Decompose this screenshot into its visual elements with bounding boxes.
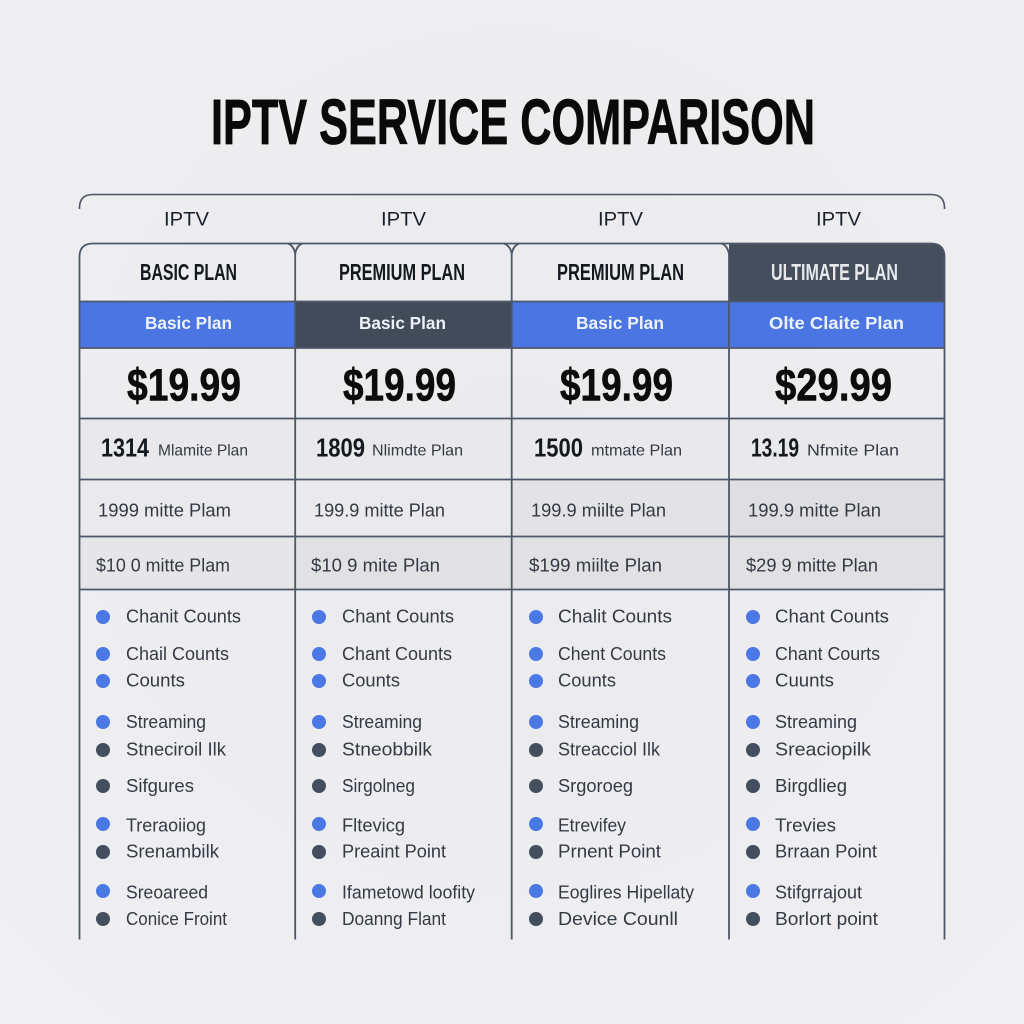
- feature list column 4: [746, 606, 889, 929]
- feature list column 3: [529, 606, 694, 929]
- prices: $19.99: [343, 360, 456, 410]
- plan name header row: PREMIUM PLAN: [339, 259, 465, 285]
- row: bold numbers: 1809: [316, 433, 365, 463]
- feature list column 3: Streacciol Ilk: [558, 740, 661, 760]
- row: shaded price cells: $199 miilte Plan: [529, 556, 662, 576]
- top bracket with IPTV labels: [80, 194, 944, 231]
- row: shaded cells: [80, 480, 944, 536]
- feature list column 1: Stneciroil Ilk: [126, 740, 227, 760]
- feature list column 3: Chent Counts: [558, 644, 666, 664]
- feature list column 1: Chail Counts: [126, 644, 229, 664]
- feature list column 4: Stifgrrajout: [775, 882, 862, 902]
- feature list column 4: Chant Counts: [775, 606, 889, 626]
- feature list column 1: Conice Froint: [126, 909, 227, 929]
- feature list column 1: Streaming: [126, 712, 206, 732]
- row: bold numbers: 1500: [534, 433, 583, 463]
- row: bold numbers: Nfmite Plan: [807, 442, 899, 460]
- row: shaded price cells: $29 9 mitte Plan: [746, 556, 878, 576]
- feature list column 1: Chanit Counts: [126, 606, 241, 626]
- prices: $19.99: [127, 360, 241, 410]
- feature list column 2: Doanng Flant: [342, 909, 446, 929]
- top bracket with IPTV labels: IPTV: [598, 210, 643, 231]
- plan name header row: ULTIMATE PLAN: [771, 259, 898, 285]
- feature list column 2: Streaming: [342, 712, 422, 732]
- row: shaded price cells: $10 0 mitte Plam: [96, 556, 230, 576]
- prices: $29.99: [775, 360, 892, 410]
- feature list column 1: Sifgures: [126, 776, 194, 796]
- row: shaded cells: 199.9 miilte Plan: [531, 500, 666, 520]
- feature list column 2: Preaint Point: [342, 842, 446, 862]
- feature list column 4: Chant Courts: [775, 644, 880, 664]
- plan name header row: PREMIUM PLAN: [557, 259, 684, 285]
- feature list column 1: [96, 606, 241, 929]
- feature list column 2: Chant Counts: [342, 644, 452, 664]
- feature list column 3: Streaming: [558, 712, 639, 732]
- row: shaded cells: 1999 mitte Plam: [98, 500, 231, 520]
- feature list column 4: Brraan Point: [775, 842, 877, 862]
- feature list column 2: Counts: [342, 670, 400, 690]
- feature list column 1: Treraoiiog: [126, 816, 206, 836]
- feature list column 2: Fltevicg: [342, 816, 405, 836]
- row: shaded price cells: $10 9 mite Plan: [311, 556, 440, 576]
- plan subtitle band: Basic Plan: [145, 313, 232, 333]
- feature list column 4: Trevies: [775, 816, 836, 836]
- plan subtitle band: Olte Claite Plan: [769, 313, 904, 333]
- feature list column 2: Sirgolneg: [342, 776, 415, 796]
- feature list column 1: Counts: [126, 670, 185, 690]
- feature list column 2: Stneobbilk: [342, 740, 433, 760]
- top bracket with IPTV labels: IPTV: [381, 210, 426, 231]
- row: bold numbers: 1314: [101, 433, 149, 463]
- feature list column 3: Chalit Counts: [558, 606, 672, 626]
- row: bold numbers: Nlimdte Plan: [372, 442, 463, 460]
- plan subtitle band: [80, 301, 944, 348]
- plan subtitle band: Basic Plan: [576, 313, 664, 333]
- feature list column 3: Eoglires Hipellaty: [558, 882, 694, 902]
- row: bold numbers: Mlamite Plan: [158, 442, 248, 460]
- row: bold numbers: [80, 419, 944, 480]
- feature list column 4: Borlort point: [775, 909, 878, 929]
- feature list column 4: Sreaciopilk: [775, 740, 872, 760]
- feature list column 2: Ifametowd loofity: [342, 882, 475, 902]
- plan name header row: BASIC PLAN: [140, 259, 237, 285]
- plan subtitle band: Basic Plan: [359, 313, 446, 333]
- row: bold numbers: 13.19: [751, 433, 799, 463]
- feature list column 3: Device Counll: [558, 909, 678, 929]
- feature list column 2: Chant Counts: [342, 606, 454, 626]
- feature list column 1: Sreoareed: [126, 882, 208, 902]
- feature list column 2: [312, 606, 475, 929]
- prices: $19.99: [560, 360, 673, 410]
- row: shaded cells: 199.9 mitte Plan: [748, 500, 881, 520]
- feature list column 4: Cuunts: [775, 670, 834, 690]
- table grid: [80, 244, 944, 940]
- top bracket with IPTV labels: IPTV: [164, 210, 209, 231]
- feature list column 3: Etrevifey: [558, 816, 626, 836]
- comparison table: [80, 244, 944, 940]
- top bracket with IPTV labels: IPTV: [816, 210, 861, 231]
- row: bold numbers: mtmate Plan: [591, 442, 682, 460]
- feature list column 3: Srgoroeg: [558, 776, 633, 796]
- feature list column 4: Streaming: [775, 712, 857, 732]
- row: shaded cells: 199.9 mitte Plan: [314, 500, 445, 520]
- prices: [127, 360, 892, 410]
- feature list column 1: Srenambilk: [126, 842, 220, 862]
- row: shaded price cells: [80, 537, 944, 589]
- feature list column 3: Counts: [558, 670, 616, 690]
- plan name header row: [140, 244, 944, 301]
- feature list column 3: Prnent Point: [558, 842, 661, 862]
- feature list column 4: Birgdlieg: [775, 776, 847, 796]
